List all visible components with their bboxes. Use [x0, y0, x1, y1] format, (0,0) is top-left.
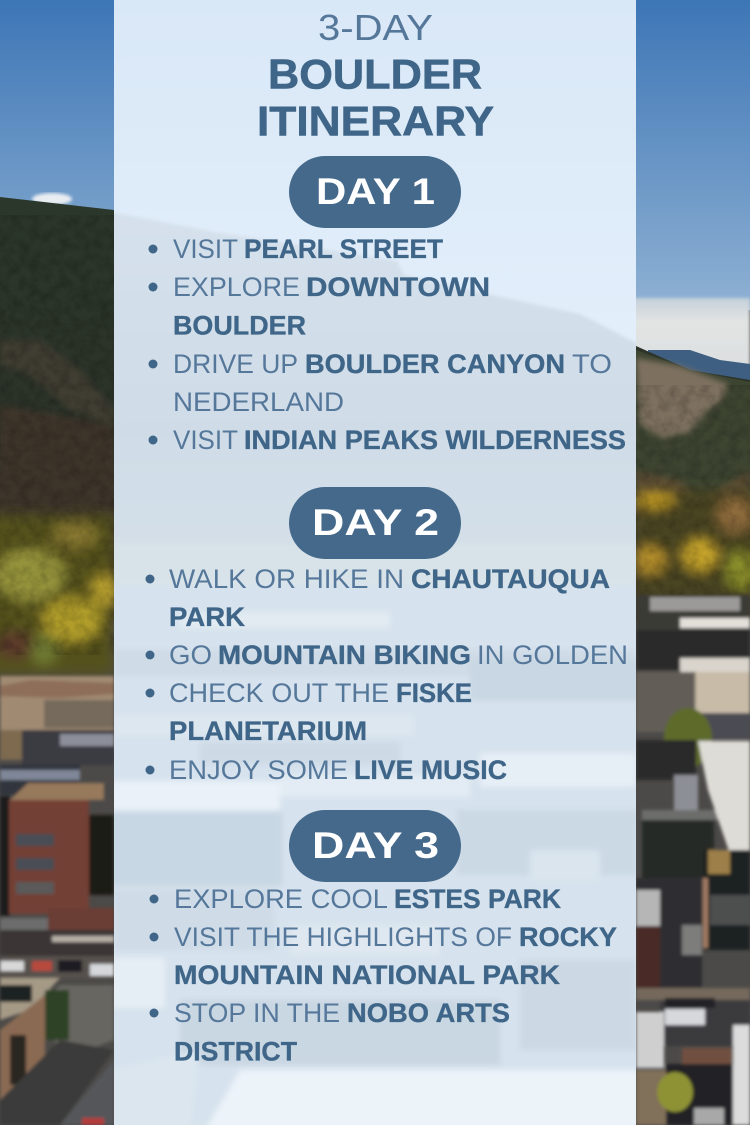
day 1 list: VISIT — [173, 425, 238, 455]
day 2 list: FISKE — [396, 678, 472, 708]
rocky band: left slope — [0, 340, 114, 425]
mountain slope: right rocky face — [636, 350, 750, 560]
day 1 list: BOULDER CANYON — [305, 349, 565, 379]
day 3 pill — [289, 810, 461, 882]
day 2 pill: DAY 2 — [312, 502, 439, 543]
day 3 list: EXPLORE COOL — [174, 884, 388, 914]
day 2 list — [146, 564, 628, 785]
mountain slope: main — [0, 197, 750, 620]
day 3 pill: DAY 3 — [312, 825, 439, 866]
day 1 pill: DAY 1 — [316, 171, 435, 212]
day 2 list: CHECK OUT THE — [169, 678, 389, 708]
day 3 list: ROCKY — [519, 922, 617, 952]
day 2 list: ENJOY SOME — [169, 755, 348, 785]
day 3 list: MOUNTAIN NATIONAL PARK — [174, 960, 561, 990]
day 3 list: DISTRICT — [174, 1036, 297, 1066]
translucent text panel — [114, 0, 636, 1125]
day 1 pill — [289, 156, 461, 228]
day 1 list: TO — [572, 349, 612, 379]
day 3 list: VISIT THE HIGHLIGHTS OF — [174, 922, 512, 952]
day 2 list: PLANETARIUM — [169, 716, 367, 746]
day 2 list: IN GOLDEN — [477, 640, 628, 670]
day 3 list — [150, 884, 617, 1066]
day 3 list: NOBO ARTS — [347, 998, 510, 1028]
autumn trees: left — [0, 515, 119, 675]
day 2 list: LIVE MUSIC — [354, 755, 507, 785]
day 1 list: BOULDER — [173, 310, 306, 340]
day 1 list: PEARL STREET — [244, 234, 443, 264]
day 2 list: GO — [169, 640, 212, 670]
day 2 list: PARK — [169, 602, 245, 632]
title — [257, 7, 494, 144]
cloud: left ridge — [32, 193, 72, 205]
day 1 list: DRIVE UP — [173, 349, 298, 379]
day 2 pill — [289, 487, 461, 559]
day 2 list: MOUNTAIN BIKING — [218, 640, 471, 670]
day 1 list: NEDERLAND — [173, 387, 344, 417]
cloud band: right horizon — [600, 298, 750, 366]
autumn trees: right — [634, 490, 750, 600]
day 3 list: STOP IN THE — [174, 998, 340, 1028]
day 1 list: EXPLORE — [173, 272, 300, 302]
day 1 list: VISIT — [173, 234, 238, 264]
title: BOULDER — [268, 50, 482, 98]
day 1 list: INDIAN PEAKS WILDERNESS — [244, 425, 626, 455]
left buildings — [0, 676, 114, 1125]
distant ridge: right — [648, 350, 750, 400]
day 2 list: CHAUTAUQUA — [411, 564, 610, 594]
day 1 list: DOWNTOWN — [306, 272, 490, 302]
title: ITINERARY — [257, 98, 494, 144]
right buildings — [636, 595, 750, 1125]
day 2 list: WALK OR HIKE IN — [169, 564, 404, 594]
day 1 list — [148, 234, 626, 455]
day 3 list: ESTES PARK — [394, 884, 561, 914]
title: 3-DAY — [318, 7, 433, 48]
